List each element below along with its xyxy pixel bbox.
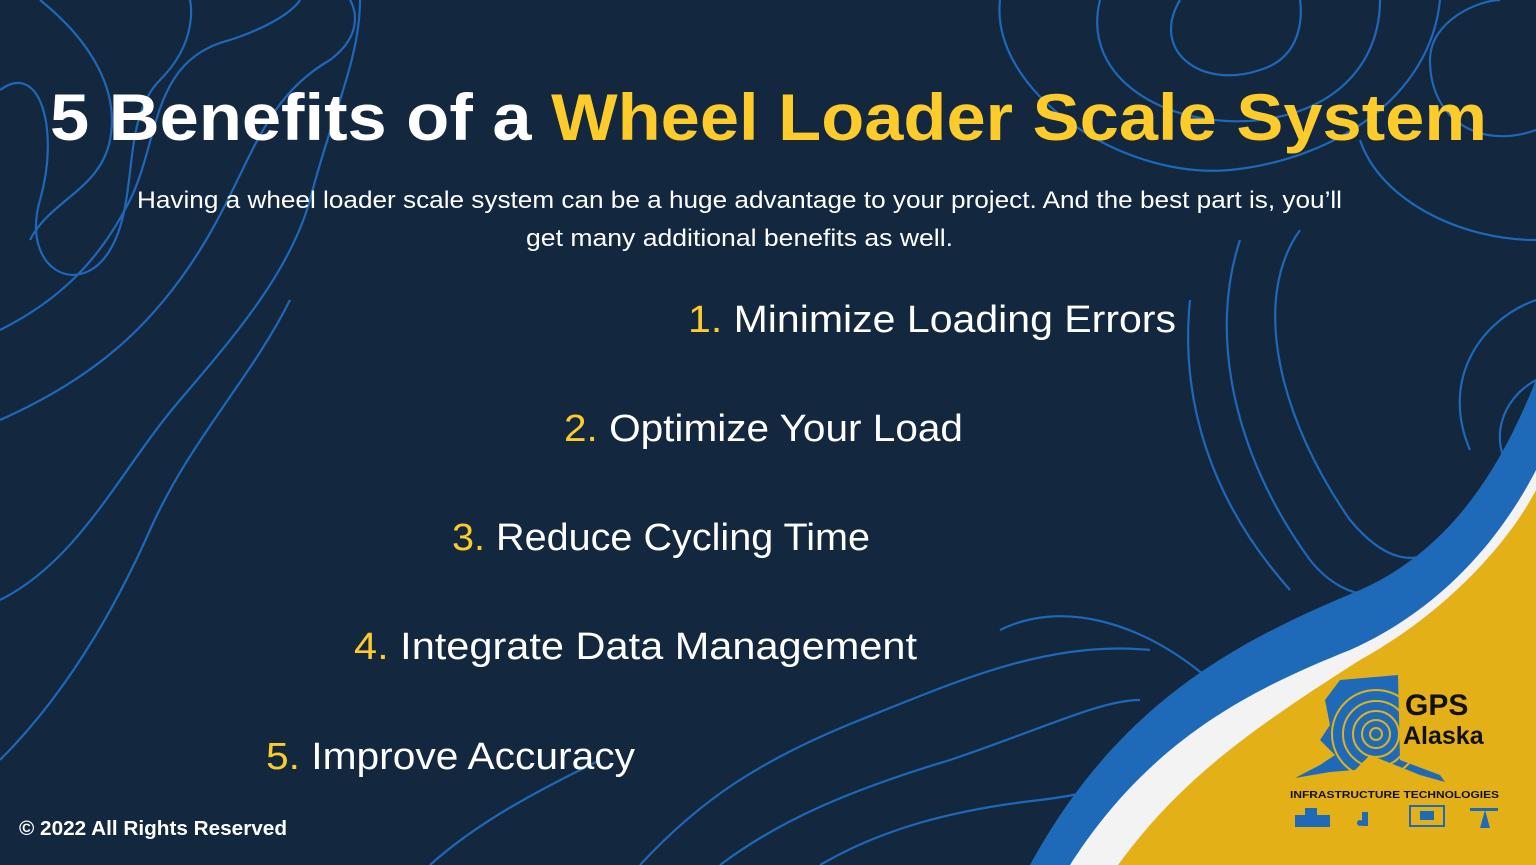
item 1: 1. Minimize Loading Errors — [688, 299, 1176, 341]
title: 5 Benefits of a Wheel Loader Scale System — [50, 80, 1487, 154]
item 3: 3. Reduce Cycling Time — [452, 517, 870, 559]
item 2: 2. Optimize Your Load — [564, 408, 963, 450]
decorative swoosh — [1030, 380, 1536, 865]
copyright: © 2022 All Rights Reserved — [19, 818, 287, 840]
logo — [1290, 675, 1499, 828]
logo: GPS — [1405, 689, 1468, 722]
benefit list — [266, 299, 1176, 778]
subtitle: Having a wheel loader scale system can be a huge advantage to your project. And the best part is, you’ll — [137, 187, 1342, 214]
subtitle: get many additional benefits as well. — [526, 225, 953, 252]
icons: equipment — [1295, 806, 1498, 828]
item 5: 5. Improve Accuracy — [266, 736, 635, 778]
logo: INFRASTRUCTURE TECHNOLOGIES — [1290, 789, 1499, 801]
item 4: 4. Integrate Data Management — [354, 626, 917, 668]
logo: Alaska — [1403, 722, 1485, 750]
icon: alaska map — [1295, 675, 1445, 782]
subtitle — [137, 187, 1342, 252]
